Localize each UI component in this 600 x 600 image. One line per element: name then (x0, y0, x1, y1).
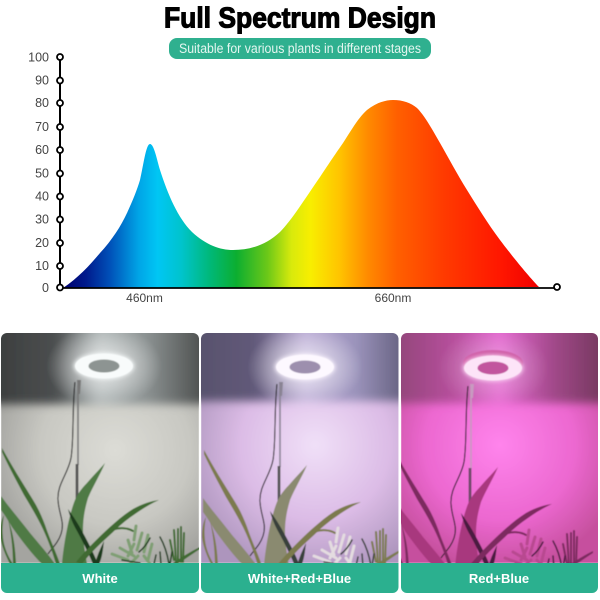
y axis labels: 100 (28, 50, 49, 64)
spectrum curve (63, 100, 539, 288)
y axis labels: 0 (42, 281, 49, 295)
y axis labels: 60 (35, 143, 49, 157)
panel: red blue light (401, 333, 598, 593)
x axis (57, 284, 560, 290)
caption: Red+Blue (401, 563, 599, 593)
x axis labels: 660nm (375, 291, 411, 305)
photo: pink lamp on wall (401, 333, 598, 563)
y axis labels: 70 (35, 120, 49, 134)
panel: white light (1, 333, 199, 593)
y axis labels (28, 50, 49, 295)
subtitle pill: Suitable for various plants in different stages (179, 41, 421, 56)
photo: white lamp on wall (1, 333, 199, 563)
x axis labels: 460nm (126, 291, 163, 305)
y axis (57, 54, 63, 288)
caption: White (1, 563, 199, 593)
spectrum chart (28, 50, 560, 305)
subtitle pill (169, 38, 431, 59)
y axis labels: 50 (35, 166, 49, 180)
y axis labels: 40 (35, 190, 49, 204)
y axis labels: 10 (35, 259, 49, 273)
y axis labels: 90 (35, 74, 49, 88)
photo: lavender lamp on wall (201, 333, 398, 563)
y axis labels: 80 (35, 96, 49, 110)
caption: White: White (82, 571, 118, 586)
y axis labels: 20 (35, 236, 49, 250)
x axis labels (126, 291, 411, 305)
panel: white red blue light (201, 333, 398, 593)
caption: White+Red+Blue (201, 563, 399, 593)
caption: White+Red+Blue: White+Red+Blue (248, 571, 351, 586)
caption: Red+Blue: Red+Blue (469, 571, 529, 586)
title: Full Spectrum Design (164, 2, 436, 34)
y axis labels: 30 (35, 212, 49, 226)
